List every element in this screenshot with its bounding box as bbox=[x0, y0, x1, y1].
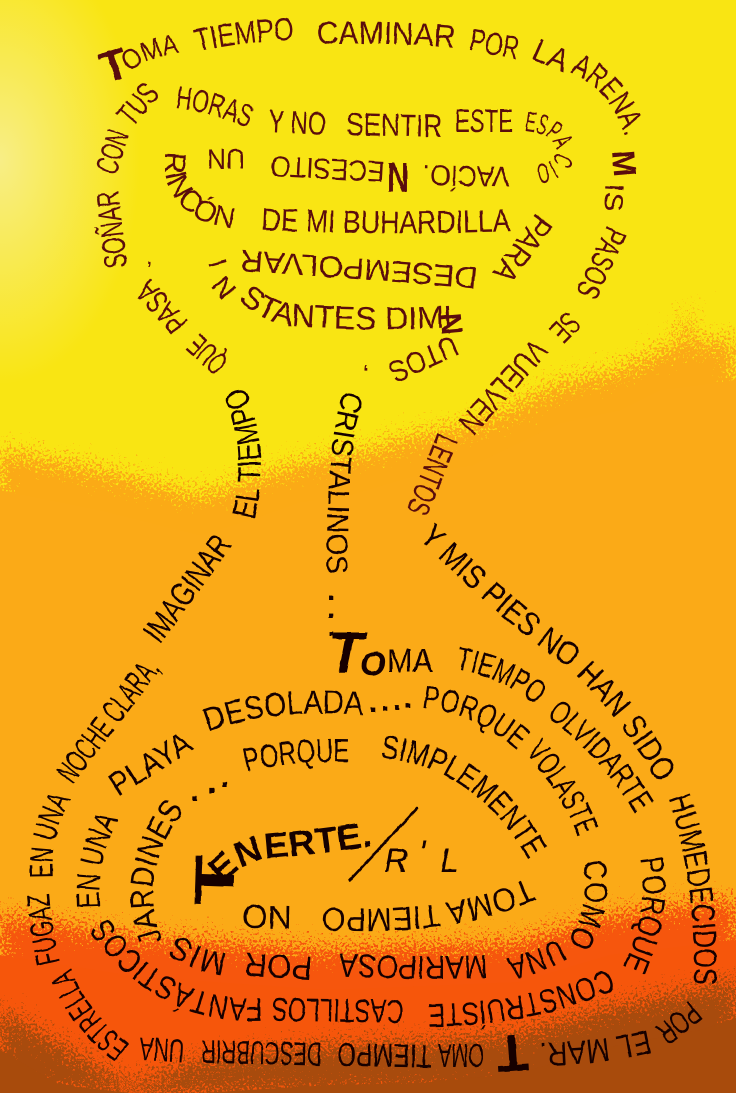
DESEMPOLVAR: DESEMPOLVAR bbox=[242, 250, 476, 289]
UTOS: UTOS bbox=[389, 338, 459, 382]
OMA: OMA bbox=[122, 35, 180, 69]
TIEMPO: TIEMPO bbox=[338, 1042, 431, 1068]
VOLASTE: VOLASTE bbox=[520, 733, 606, 840]
DESOLADA: DESOLADA bbox=[198, 683, 364, 738]
NO: NO bbox=[241, 898, 292, 936]
PASOS: PASOS bbox=[578, 226, 627, 298]
LENTOS: LENTOS bbox=[408, 433, 458, 515]
PARA: PARA bbox=[492, 214, 552, 279]
OLVIDARTE: OLVIDARTE bbox=[542, 692, 661, 818]
CAMINAR: CAMINAR bbox=[318, 21, 454, 48]
TIEMPO: TIEMPO bbox=[193, 18, 292, 50]
QUE: QUE bbox=[186, 333, 227, 374]
TUS: TUS bbox=[115, 83, 158, 124]
POR: POR bbox=[654, 1001, 703, 1044]
UN: UN bbox=[209, 148, 243, 169]
SENTIR: SENTIR bbox=[347, 112, 441, 138]
VUELVEN: VUELVEN bbox=[458, 342, 549, 436]
HORAS: HORAS bbox=[176, 86, 254, 126]
ellipsis: ... bbox=[190, 757, 229, 809]
FANTÁSTICOS: FANTÁSTICOS bbox=[83, 912, 262, 1028]
POR: POR bbox=[243, 946, 313, 987]
ECESITO: ECESITO bbox=[271, 156, 384, 182]
bold O: O bbox=[360, 645, 386, 682]
ARENA.: ARENA. bbox=[570, 55, 641, 136]
MARIPOSA: MARIPOSA bbox=[337, 946, 488, 986]
big letter T, upside down: T bbox=[494, 1022, 530, 1082]
big letter T of tenerte: T bbox=[182, 854, 247, 906]
PORQUE: PORQUE bbox=[421, 678, 536, 756]
CRISTALINOS: CRISTALINOS bbox=[326, 393, 362, 573]
ellipsis at end of neck: ... bbox=[327, 574, 335, 643]
big italic T: T bbox=[328, 621, 368, 686]
LA: LA bbox=[532, 38, 564, 72]
ESPACIO: ESPACIO bbox=[526, 112, 572, 184]
RINCÓN: RINCÓN bbox=[164, 154, 235, 228]
HUMEDECIDOS: HUMEDECIDOS bbox=[669, 794, 718, 984]
ESTRELLA: ESTRELLA bbox=[52, 968, 129, 1061]
Y MIS PIES NO HAN SIDO: Y MIS PIES NO HAN SIDO bbox=[424, 522, 674, 780]
IS: IS bbox=[604, 186, 624, 210]
poem: upper bulb of the hourglass bbox=[94, 18, 643, 515]
OMA: OMA bbox=[438, 1044, 484, 1068]
EL MAR.: EL MAR. bbox=[542, 1030, 651, 1066]
UNA: UNA bbox=[504, 932, 572, 987]
Y NO: Y NO bbox=[270, 110, 326, 135]
letter I of instantes: I bbox=[202, 256, 233, 271]
EN UNA: EN UNA bbox=[69, 806, 125, 909]
JARDINES: JARDINES bbox=[123, 792, 190, 950]
ENERTE.: ENERTE. bbox=[200, 813, 374, 890]
STANTES DIMI: STANTES DIMI bbox=[241, 286, 450, 330]
CON: CON bbox=[96, 129, 129, 174]
letter N of instantes: N bbox=[205, 270, 242, 305]
PASA: PASA bbox=[138, 278, 188, 334]
MIS: MIS bbox=[163, 929, 229, 983]
SOÑAR: SOÑAR bbox=[94, 191, 127, 268]
signature slash bbox=[350, 808, 417, 880]
TIEMPO: TIEMPO bbox=[454, 639, 554, 711]
big letter M: M bbox=[605, 148, 643, 178]
COMO: COMO bbox=[561, 858, 615, 957]
SIMPLEMENTE: SIMPLEMENTE bbox=[379, 728, 554, 864]
big letter T: T bbox=[94, 39, 135, 94]
MA: MA bbox=[387, 642, 433, 679]
NOCHE CLARA,: NOCHE CLARA, bbox=[49, 651, 167, 789]
IMAGINAR: IMAGINAR bbox=[136, 527, 238, 649]
PLAYA: PLAYA bbox=[102, 724, 198, 803]
POR: POR bbox=[470, 29, 518, 60]
EL TIEMPO: EL TIEMPO bbox=[216, 383, 268, 521]
SE: SE bbox=[548, 312, 580, 344]
poem: neck and lower bulb of the hourglass bbox=[27, 390, 718, 1082]
DESCUBRIR: DESCUBRIR bbox=[202, 1040, 320, 1066]
CASTILLOS: CASTILLOS bbox=[272, 991, 404, 1030]
UNA: UNA bbox=[140, 1038, 183, 1062]
PORQUE: PORQUE bbox=[617, 854, 673, 979]
big letter N, upside down: N bbox=[387, 154, 409, 201]
DE MI BUHARDILLA: DE MI BUHARDILLA bbox=[262, 208, 511, 234]
signature initials: R'L bbox=[384, 834, 459, 880]
FUGAZ: FUGAZ bbox=[19, 892, 67, 969]
CONSTRUÍSTE: CONSTRUÍSTE bbox=[428, 962, 620, 1034]
big letter N, sideways: N bbox=[433, 312, 468, 336]
ESTE: ESTE bbox=[456, 109, 512, 132]
TOMA TIEMPO: TOMA TIEMPO bbox=[321, 872, 540, 939]
EN UNA: EN UNA bbox=[23, 786, 77, 879]
comma after pasa: , bbox=[146, 243, 153, 270]
ellipsis: .... bbox=[369, 682, 412, 719]
comma after utos: , bbox=[362, 362, 369, 389]
VACÍO.: VACÍO. bbox=[424, 165, 510, 192]
PORQUE: PORQUE bbox=[239, 732, 350, 779]
